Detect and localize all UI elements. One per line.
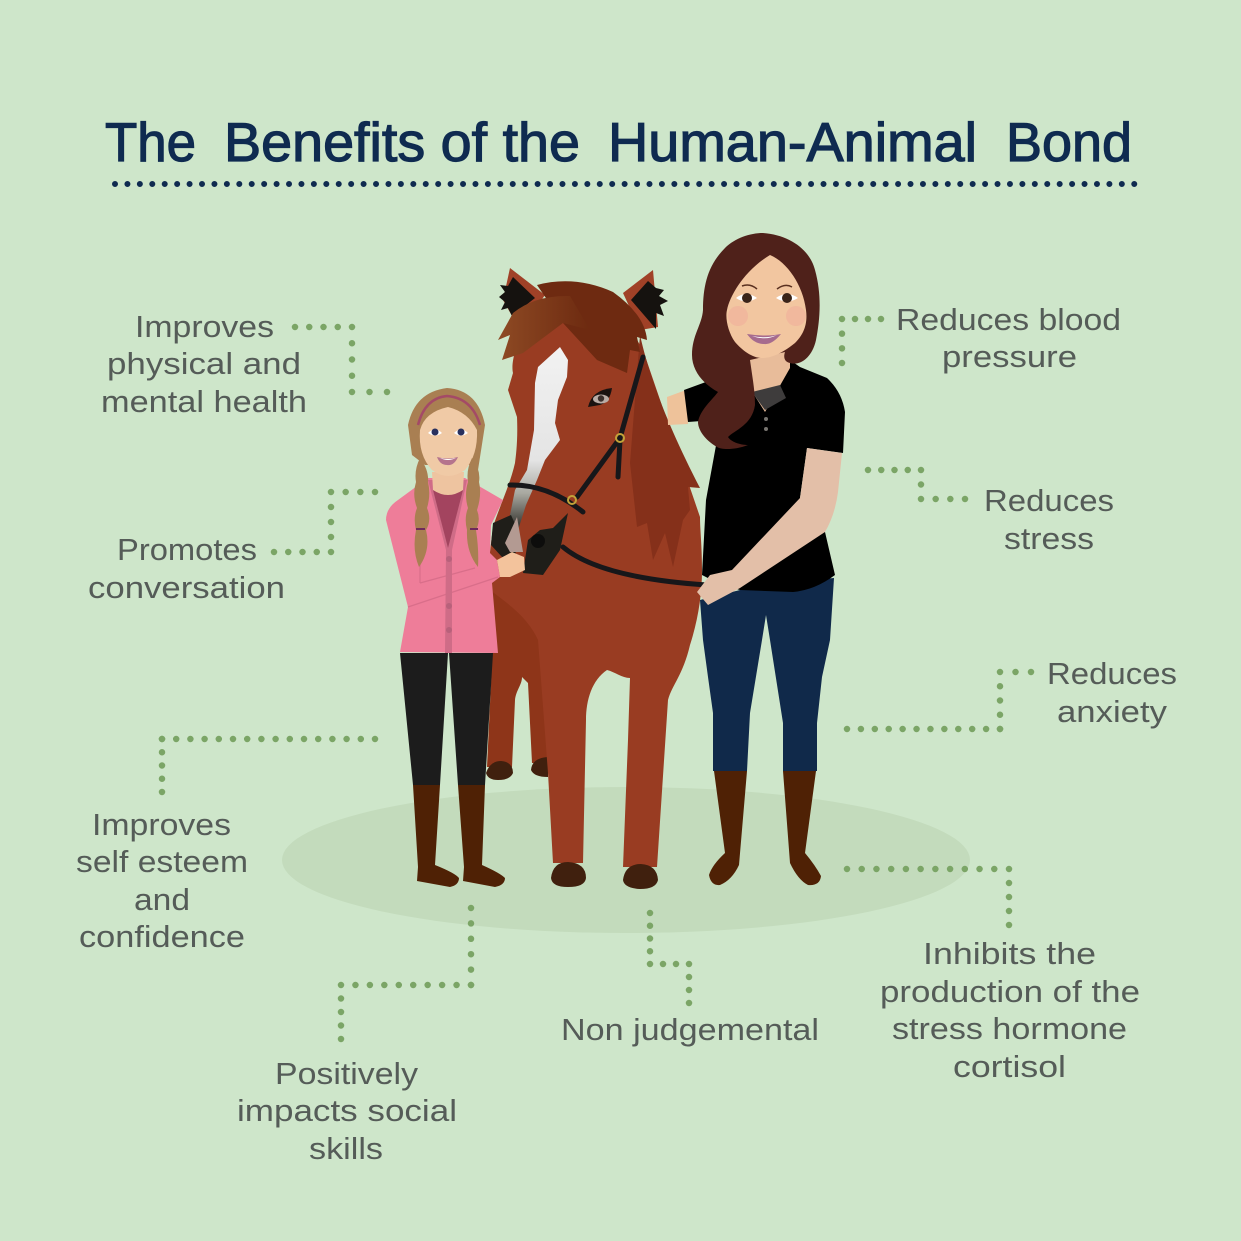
text: reduces blood pressure: pressure (942, 339, 1077, 374)
ground shadow ellipse (282, 787, 970, 933)
connector: cortisol (847, 869, 1012, 928)
horse eye (588, 388, 612, 407)
title (105, 111, 1132, 173)
text: reduces anxiety (1047, 656, 1177, 729)
title: The (105, 111, 196, 173)
girl face features (428, 428, 468, 465)
text: promotes conversation: conversation (88, 570, 285, 605)
text: inhibits cortisol: Inhibits the (923, 936, 1096, 971)
woman (667, 233, 845, 885)
text: improves self esteem and confidence: Improves (92, 807, 231, 842)
title: Benefits of the (224, 111, 580, 173)
text: reduces blood pressure: Reduces blood (896, 302, 1121, 337)
connector: conversation (271, 492, 375, 555)
girl cardigan (386, 478, 503, 653)
horse body and head (489, 285, 702, 867)
text: promotes conversation: Promotes (117, 532, 257, 567)
text: improves physical and mental health: physical and (107, 346, 301, 381)
text: reduces anxiety: Reduces (1047, 656, 1177, 691)
text: improves self esteem and confidence: and (134, 882, 190, 917)
woman shirt buttons (764, 417, 768, 431)
text: reduces blood pressure (896, 302, 1121, 374)
woman hair (692, 233, 820, 449)
text: improves physical and mental health (101, 309, 307, 419)
horse hooves (551, 862, 658, 889)
girl hand (497, 552, 525, 577)
title dotted underline (115, 181, 1134, 187)
horse back legs (486, 575, 549, 780)
title: Bond (1006, 111, 1132, 173)
text: positively impacts social skills: Positively (275, 1056, 419, 1091)
text: inhibits cortisol: cortisol (953, 1049, 1066, 1084)
text: inhibits cortisol: stress hormone (892, 1011, 1127, 1046)
woman left arm (667, 390, 688, 425)
girl legs (400, 653, 493, 785)
woman facial features (728, 285, 806, 344)
girl (386, 388, 525, 887)
text: promotes conversation (88, 532, 285, 605)
horse (486, 268, 707, 889)
text: reduces anxiety: anxiety (1057, 694, 1168, 729)
connector: non judgemental (650, 913, 692, 1006)
horse ears (499, 268, 668, 330)
text: non judgemental: Non judgemental (561, 1012, 819, 1047)
girl hair (408, 388, 485, 470)
girl headband (418, 396, 480, 425)
horse mane (498, 281, 700, 567)
connector: social skills (338, 908, 471, 1042)
woman collar (752, 385, 786, 410)
woman face (726, 255, 806, 358)
text: positively impacts social skills: skills (309, 1131, 383, 1166)
connector: self esteem (159, 739, 375, 795)
text: inhibits cortisol: production of the (880, 974, 1140, 1009)
woman boots (709, 771, 821, 885)
girl boots (413, 785, 505, 887)
text: reduces stress: stress (1004, 521, 1094, 556)
white blaze (510, 347, 568, 530)
girl face (420, 407, 477, 476)
text: positively impacts social skills: impacts social (237, 1093, 457, 1128)
woman jeans (700, 578, 834, 771)
girl braids (414, 458, 480, 567)
woman neck (748, 350, 790, 412)
connector: anxiety (847, 669, 1034, 729)
connector: blood pressure (839, 319, 881, 366)
text: inhibits cortisol (880, 936, 1140, 1084)
text: improves self esteem and confidence (76, 807, 248, 954)
horse muzzle (491, 513, 568, 575)
bridle (510, 357, 707, 585)
text: improves physical and mental health: Improves (135, 309, 274, 344)
girl sleeve folds (408, 560, 498, 607)
text: improves self esteem and confidence: self esteem (76, 844, 248, 879)
woman right arm and hand (697, 448, 842, 605)
text: reduces stress: Reduces (984, 483, 1114, 518)
text: improves physical and mental health: mental health (101, 384, 307, 419)
text: improves self esteem and confidence: confidence (79, 919, 245, 954)
connector: physical and mental health (295, 327, 390, 395)
text: positively impacts social skills (237, 1056, 457, 1166)
woman shirt (684, 360, 845, 592)
title: Human-Animal (608, 111, 977, 173)
connector: stress (868, 470, 968, 502)
girl shirt and placket (428, 472, 467, 653)
text: reduces stress (984, 483, 1114, 556)
